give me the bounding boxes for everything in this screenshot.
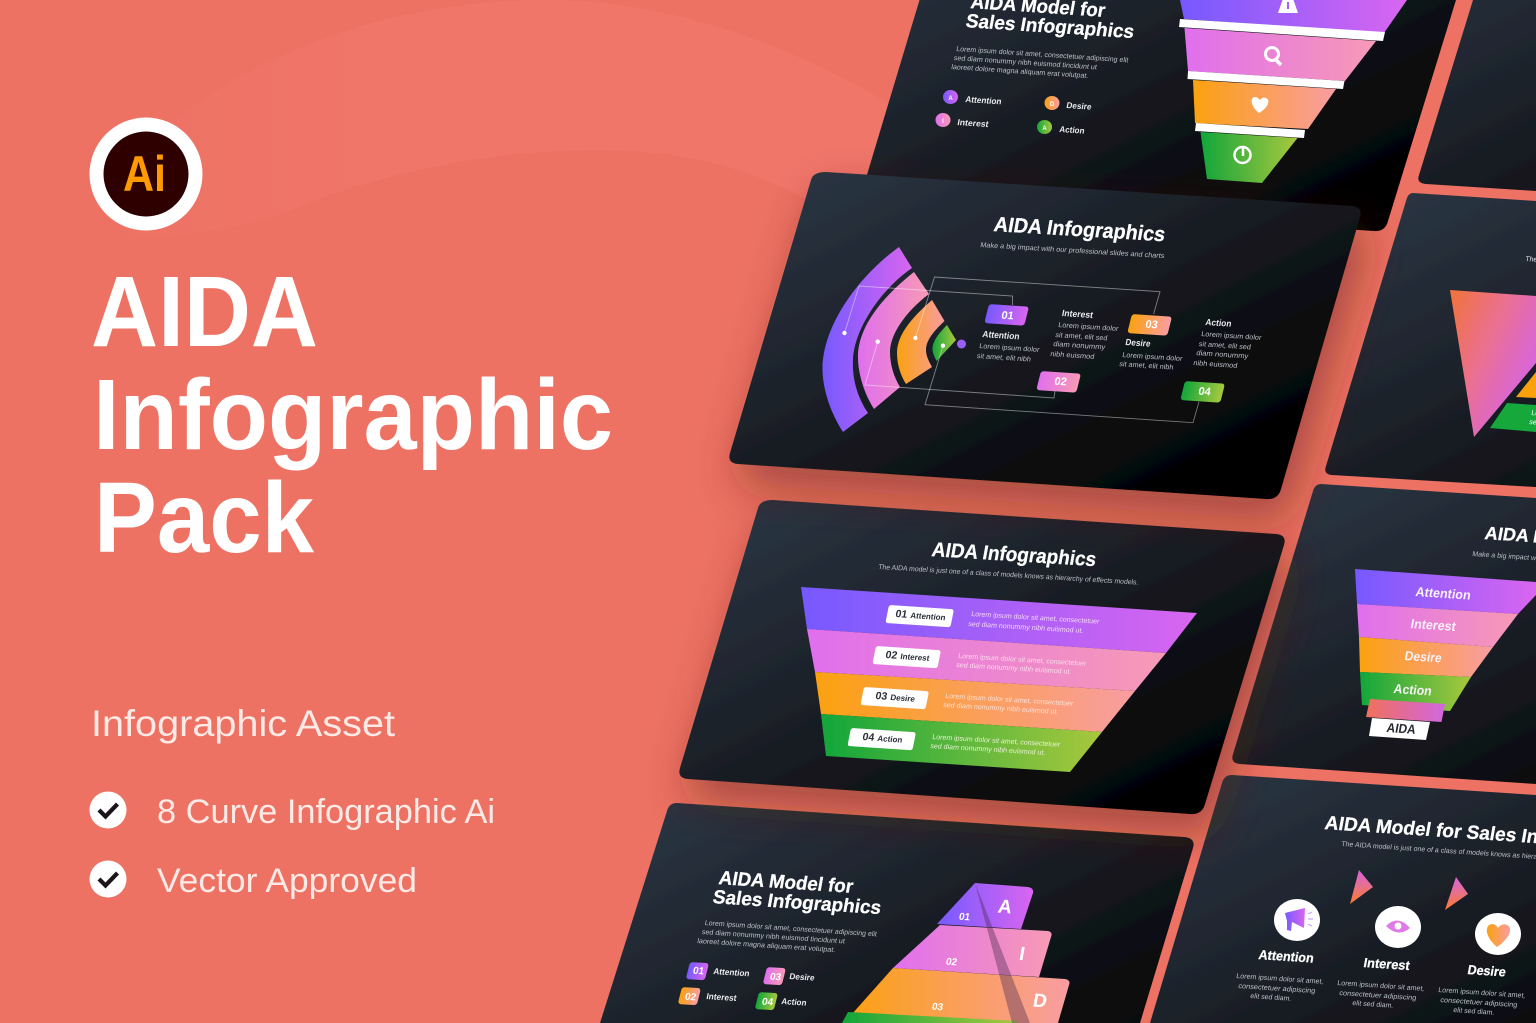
icon: heart desire xyxy=(1475,913,1521,955)
legend: A xyxy=(1042,126,1047,132)
subtitle: The AIDA model is just one of a class of models knows as hierarchy of effects models. xyxy=(878,564,1139,587)
badge 02: 02 xyxy=(1053,376,1068,388)
legend: A xyxy=(948,96,953,102)
panel: top right cropped slide xyxy=(1418,0,1536,191)
text: interest: sit amet, elit sed xyxy=(1055,332,1108,342)
triangle chart xyxy=(1450,290,1536,437)
text: attention: Attention xyxy=(982,329,1020,341)
row: 04 action: Lorem ipsum dolor sit amet, consectetuer xyxy=(932,734,1062,749)
badge 03 xyxy=(1127,314,1172,336)
text: interest xyxy=(1050,308,1120,361)
text: interest: Lorem ipsum dolor xyxy=(1058,322,1120,333)
legend: I xyxy=(942,119,944,125)
badge 02 xyxy=(1036,371,1081,393)
icon: magnifier xyxy=(1266,48,1281,65)
step: desire: consectetuer adipiscing xyxy=(1440,997,1518,1009)
step: attention: elit sed diam. xyxy=(1250,993,1292,1003)
row: 03 desire: Lorem ipsum dolor sit amet, consectetuer xyxy=(945,693,1075,708)
heading: AIDA Infographics xyxy=(992,213,1167,246)
row: 03 desire: sed diam nonummy nibh euismod ut. xyxy=(943,702,1059,716)
logo: Adobe Illustrator badge xyxy=(90,118,202,230)
row: 02 interest: sed diam nonummy nibh euismod ut. xyxy=(956,662,1072,676)
funnel chart xyxy=(1179,0,1407,183)
row: 03 desire: Desire xyxy=(890,693,916,704)
row: 02 interest: Interest xyxy=(900,652,930,663)
step: interest xyxy=(1337,955,1425,1010)
row: 03 desire: 03 xyxy=(874,690,888,703)
row: 01 attention xyxy=(885,605,1101,635)
pyramid chart: 03 xyxy=(931,1002,944,1013)
body text: laoreet dolore magna aliquam erat volutpat. xyxy=(697,938,836,954)
legend: 03 xyxy=(769,972,782,983)
panel: AIDA trapezoid funnel slide xyxy=(679,500,1285,814)
feature: vector approved: Vector Approved xyxy=(157,862,417,900)
subtitle: asset type: Infographic Asset xyxy=(91,703,396,744)
legend: Attention xyxy=(965,94,1002,106)
pyramid chart xyxy=(842,883,1070,1023)
pyramid chart: A xyxy=(996,897,1014,918)
text: interest: diam nonummy xyxy=(1053,341,1106,351)
row: 02 interest: 02 xyxy=(884,649,898,662)
pyramid chart: 01 xyxy=(958,912,971,923)
pyramid chart: 02 xyxy=(945,957,958,968)
step: desire: Desire xyxy=(1466,962,1507,979)
icon: warning xyxy=(1278,0,1298,13)
icon: power xyxy=(1234,147,1250,163)
legend: Interest xyxy=(706,991,738,1003)
text: attention: sit amet, elit nibh xyxy=(976,353,1031,364)
text: attention xyxy=(976,329,1041,364)
icon: heart xyxy=(1252,97,1268,113)
connector dots xyxy=(842,331,945,348)
legend: Attention xyxy=(713,966,750,978)
main title: Infographic xyxy=(93,359,613,471)
panel: AIDA process steps xyxy=(1150,775,1536,1023)
badge 04: 04 xyxy=(1197,386,1213,398)
row: 01 attention: Attention xyxy=(910,611,946,622)
body text: Lorem ipsum dolor sit amet, consectetuer adipiscing elit xyxy=(704,920,877,938)
legend: Interest xyxy=(957,117,990,129)
panel: inverted triangle slide xyxy=(1325,193,1536,487)
funnel chart xyxy=(801,587,1197,772)
main title: AIDA xyxy=(91,256,318,368)
legend: Desire xyxy=(789,971,816,983)
legend: 01 xyxy=(692,966,705,977)
main title xyxy=(91,256,613,574)
heading: AIDA Infographics xyxy=(930,539,1098,571)
text: action: nibh euismod xyxy=(1193,360,1238,370)
legend: 02 xyxy=(684,992,697,1003)
heading: Sales Infographics xyxy=(964,11,1136,43)
row: 02 interest: Lorem ipsum dolor sit amet, consectetuer xyxy=(958,653,1088,668)
heading: AIDA Model for xyxy=(717,868,855,898)
panel: AIDA pyramid slide xyxy=(600,803,1194,1023)
badge 03: 03 xyxy=(1144,319,1159,331)
body text: sed diam nonummy nibh euismod tincidunt ut xyxy=(953,55,1097,71)
legend: Desire xyxy=(1066,100,1093,112)
row: 04 action xyxy=(847,728,1062,757)
text: interest: Interest xyxy=(1061,308,1094,320)
subtitle: Make a big impact with our professional slides and charts xyxy=(980,242,1165,260)
body text xyxy=(697,920,877,954)
body text: laoreet dolore magna aliquam erat volutpat. xyxy=(951,64,1089,80)
legend: Action xyxy=(1059,124,1085,136)
connector lines xyxy=(844,277,1199,423)
panel: AIDA arcs slide xyxy=(729,172,1361,499)
icon: eye interest xyxy=(1375,906,1421,948)
text: action xyxy=(1193,317,1263,370)
row: 03 desire xyxy=(860,687,1075,716)
step: desire: elit sed diam. xyxy=(1453,1007,1495,1017)
heading: Sales Infographics xyxy=(711,887,883,919)
body text: sed diam nonummy nibh euismod tincidunt ut xyxy=(701,929,845,945)
text: action: diam nonummy xyxy=(1196,350,1249,360)
text: desire: Lorem ipsum dolor xyxy=(1122,352,1184,363)
funnel chart xyxy=(1355,569,1536,740)
text: desire: Desire xyxy=(1125,337,1151,349)
legend xyxy=(936,90,1093,136)
funnel chart: AIDA xyxy=(1385,720,1418,737)
row: 04 action: 04 xyxy=(861,731,875,744)
badge 04 xyxy=(1180,381,1225,403)
row: 01 attention: 01 xyxy=(894,608,908,621)
funnel chart: Interest xyxy=(1409,616,1458,634)
heading xyxy=(711,868,883,919)
row: 01 attention: sed diam nonummy nibh euismod ut. xyxy=(968,621,1084,635)
step: attention: Attention xyxy=(1257,947,1315,966)
subtitle fragment: Make a big impact w xyxy=(1472,551,1536,562)
step: interest: elit sed diam. xyxy=(1352,1000,1394,1010)
row: 04 action: sed diam nonummy nibh euismod ut. xyxy=(930,743,1046,757)
legend: D xyxy=(1050,102,1055,108)
panel: AIDA model funnel with icons xyxy=(860,0,1456,231)
step: attention: consectetuer adipiscing xyxy=(1238,983,1316,995)
step: interest: Interest xyxy=(1362,955,1412,973)
text: action: Lorem ipsum dolor xyxy=(1201,331,1263,342)
step: desire: Lorem ipsum dolor sit amet, xyxy=(1438,987,1526,1000)
main title: Pack xyxy=(94,462,314,574)
step: interest: consectetuer adipiscing xyxy=(1339,990,1417,1002)
feature: curve infographic: 8 Curve Infographic Ai xyxy=(157,793,495,831)
text: attention: Lorem ipsum dolor xyxy=(979,343,1041,354)
panel: stacked funnel slide xyxy=(1232,484,1536,784)
pyramid chart: D xyxy=(1031,991,1049,1012)
pyramid chart: I xyxy=(1017,944,1026,965)
step: interest: Lorem ipsum dolor sit amet, xyxy=(1337,980,1425,993)
funnel chart: Desire xyxy=(1403,648,1443,665)
text: interest: nibh euismod xyxy=(1050,351,1095,361)
arc chart xyxy=(822,247,966,432)
arrows xyxy=(1350,870,1468,910)
body text: Lorem ipsum dolor sit amet, consectetuer adipiscing elit xyxy=(956,46,1129,64)
legend: 04 xyxy=(761,997,774,1008)
body text xyxy=(951,46,1129,80)
text: action: Action xyxy=(1205,317,1232,329)
funnel chart: Action xyxy=(1392,681,1433,698)
legend xyxy=(678,962,816,1010)
row: 02 interest xyxy=(872,646,1088,676)
step: attention: Lorem ipsum dolor sit amet, xyxy=(1236,973,1324,986)
text: desire: sit amet, elit nibh xyxy=(1119,361,1174,372)
row: 04 action: Action xyxy=(877,734,903,745)
badge 01 xyxy=(984,304,1029,326)
funnel chart: Attention xyxy=(1414,584,1472,603)
text: action: sit amet, elit sed xyxy=(1198,341,1251,351)
step: desire xyxy=(1438,962,1526,1017)
row: 01 attention: Lorem ipsum dolor sit amet, consectetuer xyxy=(971,611,1101,626)
step: attention xyxy=(1236,947,1324,1003)
badge 01: 01 xyxy=(1000,310,1015,322)
legend: Action xyxy=(781,996,807,1008)
text: desire xyxy=(1119,337,1184,372)
logo: Adobe Illustrator badge: Ai xyxy=(123,146,166,202)
icon: megaphone attention xyxy=(1274,899,1320,941)
